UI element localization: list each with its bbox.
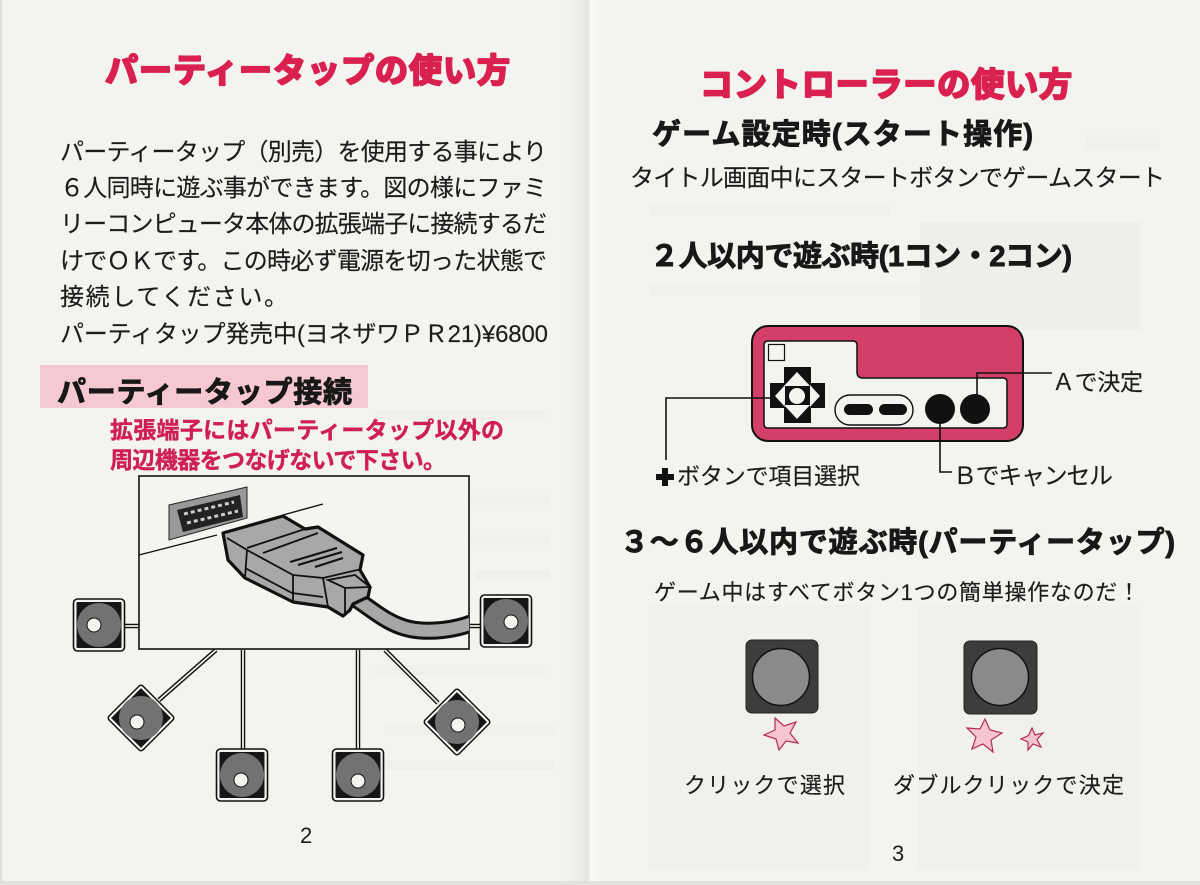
pad: left (74, 599, 124, 651)
text: start instruction: タイトル画面中にスタートボタンでゲームスタート (630, 165, 1165, 192)
warning text: 周辺機器をつなげないで下さい。 (110, 447, 446, 473)
illustration: expansion port (139, 487, 323, 555)
title: party tap usage: パーティータップの使い方 (105, 52, 510, 89)
diagram: controller (656, 326, 1143, 490)
pad: bottom right (332, 749, 384, 801)
warning text (110, 417, 504, 473)
illustration: plug and cable (223, 516, 475, 631)
diagram: party tap connector with six pads (74, 476, 532, 801)
heading: game setup: ゲーム設定時(スタート操作) (652, 118, 1033, 151)
d-pad (770, 367, 825, 423)
select and start (835, 395, 913, 425)
wires (125, 626, 481, 750)
heading: two players: ２人以内で遊ぶ時(1コン・2コン) (650, 240, 1072, 273)
illustration frame (139, 476, 469, 649)
title: controller usage: コントローラーの使い方 (700, 66, 1072, 103)
heading: party tap connection: パーティータップ接続 (57, 376, 352, 409)
label: double click to confirm: ダブルクリックで決定 (893, 773, 1124, 798)
label: B: Ｂでキャンセル (953, 463, 1113, 490)
pad: right (480, 595, 532, 647)
text block: party tap description (60, 139, 548, 348)
controller body (752, 326, 1023, 441)
label: plus button: ボタンで項目選択 (677, 463, 860, 489)
heading: three to six players: ３～６人以内で遊ぶ時(パーティータップ) (620, 526, 1175, 559)
icon: double click button (964, 641, 1043, 752)
text block: party tap description: リーコンピュータ本体の拡張端子に接続するだ (60, 211, 547, 238)
text: one button operation: ゲーム中はすべてボタン1つの簡単操作なのだ！ (654, 580, 1140, 605)
pad: lower right diamond (423, 688, 491, 756)
page number 2: 2 (300, 823, 312, 848)
text block: party tap description: パーティータップ（別売）を使用する事により (60, 139, 547, 166)
pad: bottom left (216, 749, 268, 801)
icon: single click button (746, 640, 818, 750)
warning text: 拡張端子にはパーティータップ以外の (110, 417, 504, 443)
label: A: Ａで決定 (1052, 369, 1143, 395)
buttons B and A (925, 394, 990, 424)
page number 3: 3 (892, 841, 904, 866)
text block: party tap description: パーティタップ発売中(ヨネザワＰＲ21)¥6800 (60, 321, 548, 348)
star (764, 718, 798, 750)
heading: party tap connection (40, 365, 368, 409)
text block: party tap description: 接続してください。 (60, 284, 288, 311)
stars (967, 719, 1043, 752)
text block: party tap description: ６人同時に遊ぶ事ができます。図の様にファミ (60, 175, 547, 202)
label: click to select: クリックで選択 (684, 773, 845, 798)
leader lines (666, 373, 1052, 472)
pad: lower left diamond (107, 684, 175, 752)
text block: party tap description: けでＯＫです。この時必ず電源を切った状態で (60, 248, 547, 275)
